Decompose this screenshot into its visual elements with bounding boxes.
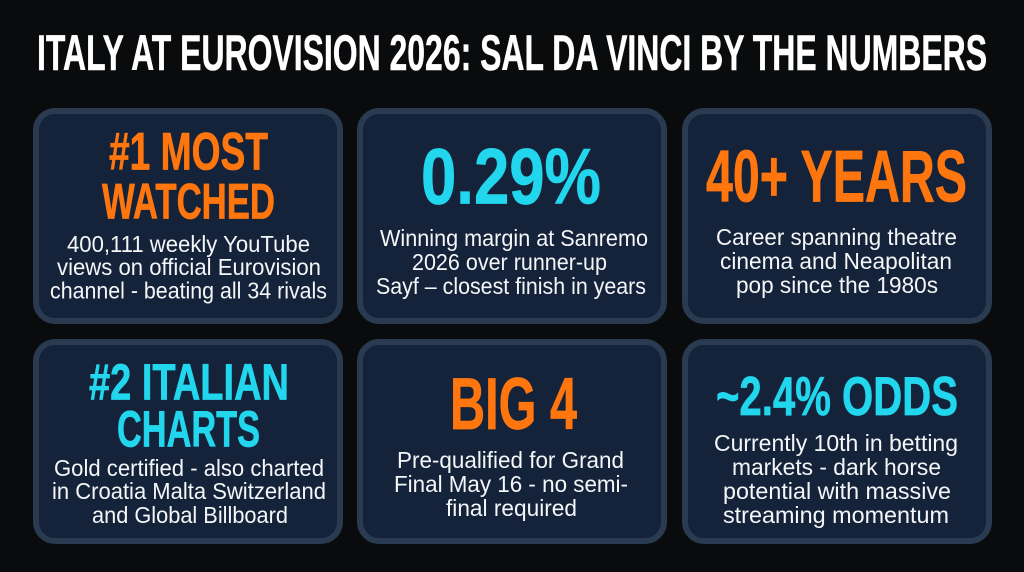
heading: #1 most watched: WATCHED [102, 172, 275, 230]
body text: YouTube views: views on official Eurovision [57, 254, 321, 280]
heading: #2 Italian charts [89, 354, 289, 458]
heading: Big 4: BIG 4 [450, 364, 577, 445]
body text: gold certified: in Croatia Malta Switzerland [52, 478, 326, 504]
heading: 0.29%: 0.29% [421, 132, 601, 220]
body text: YouTube views: 400,111 weekly YouTube [67, 231, 310, 257]
body text: career [716, 224, 957, 298]
heading: #2 Italian charts: CHARTS [117, 400, 260, 458]
body text: YouTube views: channel - beating all 34 rivals [50, 278, 327, 304]
body text: betting markets: streaming momentum [723, 502, 949, 528]
body text: Sanremo margin: Winning margin at Sanremo [380, 225, 648, 251]
body text: pre-qualified [394, 447, 628, 521]
body text: pre-qualified: Pre-qualified for Grand [397, 447, 624, 473]
panel: winning margin [360, 111, 664, 321]
body text: pre-qualified: final required [446, 495, 577, 521]
heading: #2 Italian charts: #2 ITALIAN [89, 354, 289, 410]
panel: most watched [36, 111, 340, 321]
panel: big 4 [360, 342, 664, 541]
body text: YouTube views [50, 231, 327, 304]
body text: betting markets: potential with massive [723, 478, 951, 504]
heading: #1 most watched [102, 122, 275, 230]
heading: #1 most watched: #1 MOST [109, 122, 268, 182]
body text: gold certified: Gold certified - also charted [54, 455, 324, 481]
body text: career: pop since the 1980s [736, 272, 938, 298]
body text: career: Career spanning theatre [716, 224, 957, 250]
panel: career length [685, 111, 989, 321]
body text: gold certified: and Global Billboard [92, 502, 288, 528]
body text: Sanremo margin: Sayf – closest finish in years [376, 273, 646, 299]
body text: gold certified [52, 455, 326, 528]
body text: Sanremo margin [376, 225, 648, 299]
body text: Sanremo margin: 2026 over runner-up [412, 249, 607, 275]
panel: Italian charts [36, 342, 340, 541]
body text: betting markets [714, 430, 958, 528]
body text: pre-qualified: Final May 16 - no semi- [394, 471, 628, 497]
body text: betting markets: Currently 10th in betting [714, 430, 958, 456]
body text: career: cinema and Neapolitan [720, 248, 952, 274]
panel: betting odds [685, 342, 989, 541]
body text: betting markets: markets - dark horse [732, 454, 941, 480]
